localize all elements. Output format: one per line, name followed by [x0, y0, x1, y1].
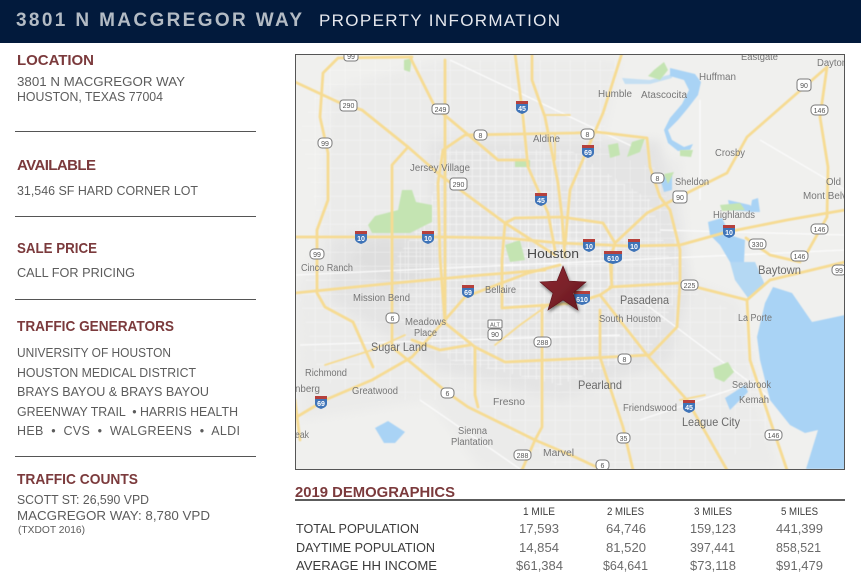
- highway shields: 249: [435, 107, 446, 114]
- property address title: 3801 N MACGREGOR WAY: [16, 10, 302, 31]
- highway shields: 225: [684, 283, 695, 290]
- sale price section: SALE PRICE: [17, 240, 97, 257]
- traffic counts section: SCOTT ST: 26,590 VPD: [17, 493, 149, 507]
- highway shields: 290: [343, 103, 354, 110]
- highway shields: 99: [321, 141, 329, 148]
- highway shields: 146: [814, 108, 825, 115]
- place labels: Eastgate: [741, 52, 778, 63]
- row: average household income: AVERAGE HH INCOME: [296, 558, 437, 573]
- table column headers: 1 MILE: [523, 506, 555, 518]
- place labels: Fresno: [493, 397, 525, 408]
- available section: 31,546 SF HARD CORNER LOT: [17, 184, 198, 198]
- row: daytime population: DAYTIME POPULATION: [296, 540, 435, 555]
- icon: property location star: [540, 266, 586, 310]
- place labels: Huffman: [699, 72, 736, 83]
- highway shields: 288: [517, 453, 528, 460]
- place labels: Bellaire: [485, 285, 516, 296]
- place labels: Jersey Village: [410, 163, 470, 174]
- place labels: Atascocita: [641, 90, 687, 101]
- location section: [17, 52, 186, 104]
- highway shields: 8: [479, 133, 483, 140]
- water bodies: [375, 68, 845, 469]
- place labels: Houston: [527, 246, 579, 261]
- place labels: Old: [826, 177, 841, 188]
- place labels: Richmond: [305, 368, 347, 379]
- traffic generators section: BRAYS BAYOU & BRAYS BAYOU: [17, 385, 209, 399]
- highway shields: 8: [586, 132, 590, 139]
- place labels: Kemah: [739, 395, 769, 406]
- traffic counts section: TRAFFIC COUNTS: [17, 471, 138, 488]
- traffic generators section: GREENWAY TRAIL • HARRIS HEALTH: [17, 405, 238, 419]
- highway shields: 6: [446, 391, 450, 398]
- place labels: Mont Belv: [803, 191, 847, 202]
- row: average household income: [296, 558, 823, 573]
- highway shields: 330: [752, 242, 763, 249]
- highway shields: 610: [607, 256, 619, 263]
- highway shields: 10: [357, 236, 365, 243]
- row: average household income: $91,479: [776, 558, 823, 573]
- place labels: Marvel: [543, 448, 574, 459]
- highway shields: 90: [676, 195, 684, 202]
- highway shields: 99: [347, 54, 355, 61]
- highway shields: 35: [620, 436, 627, 443]
- highway shields: 146: [768, 433, 779, 440]
- place labels: eak: [295, 430, 310, 441]
- traffic generators section: HOUSTON MEDICAL DISTRICT: [17, 366, 196, 380]
- highway shields: 10: [424, 236, 432, 243]
- table column headers: [523, 506, 818, 518]
- header bar: [0, 0, 861, 43]
- place labels: nberg: [295, 384, 320, 395]
- row: daytime population: [296, 540, 821, 555]
- traffic generators section: [17, 318, 240, 438]
- highway shields: 8: [656, 176, 660, 183]
- highway shields: 10: [725, 230, 733, 237]
- parks and green areas: [368, 58, 745, 382]
- place labels: Highlands: [713, 210, 755, 221]
- panel: 2019 demographics: [295, 484, 845, 573]
- place labels: Sienna: [458, 426, 487, 437]
- highway shields: 45: [537, 198, 545, 205]
- place labels: La Porte: [738, 313, 772, 324]
- row: total population: [296, 521, 823, 536]
- row: total population: 159,123: [690, 521, 736, 536]
- row: total population: 441,399: [776, 521, 823, 536]
- table column headers: 3 MILES: [694, 506, 732, 518]
- place labels: Sugar Land: [371, 340, 427, 354]
- place labels: Cinco Ranch: [301, 263, 353, 274]
- highway shields: 10: [585, 244, 593, 251]
- traffic counts section: [17, 471, 210, 536]
- row: total population: TOTAL POPULATION: [296, 521, 419, 536]
- sale price section: CALL FOR PRICING: [17, 266, 135, 280]
- place labels: Dayton: [817, 58, 847, 69]
- highway shields: 6: [391, 316, 395, 323]
- highway shields: 69: [464, 290, 472, 297]
- highway shields: [310, 52, 846, 470]
- place labels: Friendswood: [623, 403, 677, 414]
- place labels: Plantation: [451, 437, 493, 448]
- highway shields: 146: [814, 227, 825, 234]
- place labels: Humble: [598, 89, 632, 100]
- highway shields: 69: [317, 401, 325, 408]
- traffic counts section: MACGREGOR WAY: 8,780 VPD: [17, 509, 210, 523]
- highway shields: 45: [518, 106, 526, 113]
- sale price section: [17, 240, 135, 280]
- highway shields: 610: [576, 297, 588, 304]
- table column headers: 5 MILES: [781, 506, 818, 518]
- place labels: South Houston: [599, 314, 661, 325]
- demographics heading: 2019 DEMOGRAPHICS: [295, 484, 455, 501]
- place labels: [295, 52, 847, 459]
- highway shields: 10: [630, 244, 638, 251]
- place labels: Seabrook: [732, 380, 772, 391]
- available section: [17, 157, 198, 198]
- property information title: PROPERTY INFORMATION: [319, 11, 560, 30]
- traffic generators section: UNIVERSITY OF HOUSTON: [17, 346, 171, 360]
- highway shields: 6: [601, 463, 605, 470]
- highway shields: 288: [537, 340, 548, 347]
- traffic counts section: (TXDOT 2016): [18, 525, 85, 536]
- highway shields: ALT: [490, 322, 500, 328]
- place labels: League City: [682, 415, 740, 429]
- highway shields: 146: [794, 254, 805, 261]
- map of Houston area: [295, 52, 847, 470]
- row: daytime population: 14,854: [519, 540, 559, 555]
- highway shields: 90: [491, 332, 499, 339]
- table column headers: 2 MILES: [607, 506, 644, 518]
- highway shields: 69: [584, 150, 592, 157]
- place labels: Mission Bend: [353, 293, 410, 304]
- row: average household income: $73,118: [690, 558, 736, 573]
- highway shields: 290: [453, 182, 464, 189]
- highway shields: 99: [835, 268, 843, 275]
- place labels: Pasadena: [620, 293, 669, 307]
- place labels: Pearland: [578, 378, 622, 392]
- highway shields: 45: [685, 405, 693, 412]
- urban areas and street grid: [296, 60, 845, 469]
- row: total population: 64,746: [606, 521, 646, 536]
- highway network: [295, 53, 845, 470]
- row: daytime population: 81,520: [606, 540, 646, 555]
- available section: AVAILABLE: [17, 157, 96, 174]
- place labels: Place: [414, 328, 437, 339]
- row: average household income: $61,384: [516, 558, 563, 573]
- place labels: Sheldon: [675, 177, 709, 188]
- highway shields: 90: [800, 83, 808, 90]
- panel: property details sidebar: [15, 52, 256, 536]
- traffic generators section: TRAFFIC GENERATORS: [17, 318, 174, 335]
- highway shields: 8: [623, 357, 627, 364]
- row: average household income: $64,641: [603, 558, 648, 573]
- location section: LOCATION: [17, 52, 94, 69]
- place labels: Meadows: [405, 317, 446, 328]
- location section: 3801 N MACGREGOR WAY: [17, 75, 186, 89]
- highway shields: 99: [313, 252, 321, 259]
- row: total population: 17,593: [519, 521, 559, 536]
- place labels: Aldine: [533, 134, 560, 145]
- place labels: Crosby: [715, 148, 745, 159]
- place labels: Baytown: [758, 263, 801, 277]
- traffic generators section: HEB • CVS • WALGREENS • ALDI: [17, 424, 240, 438]
- row: daytime population: 397,441: [690, 540, 735, 555]
- location section: HOUSTON, TEXAS 77004: [17, 90, 163, 104]
- row: daytime population: 858,521: [776, 540, 821, 555]
- place labels: Greatwood: [352, 386, 398, 397]
